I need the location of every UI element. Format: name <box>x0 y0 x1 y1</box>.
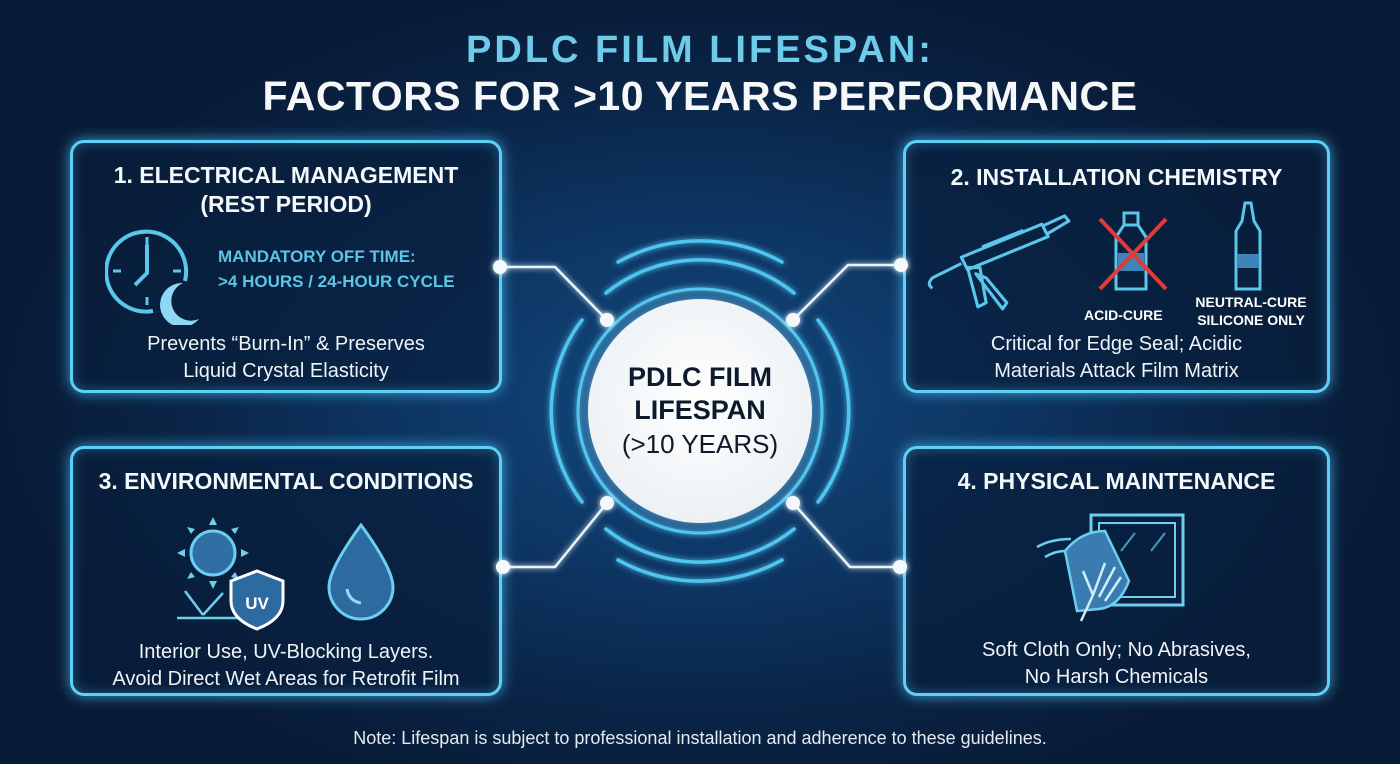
center hub circle <box>588 299 812 523</box>
center hub circle: LIFESPAN <box>634 395 766 425</box>
icon: neutral-cure bottle <box>1234 202 1262 290</box>
panel: electrical management: Liquid Crystal Elasticity <box>183 360 389 382</box>
panel: physical maintenance <box>903 446 1330 696</box>
panel: installation chemistry: Critical for Edge Seal; Acidic <box>991 333 1242 355</box>
panel: electrical management <box>70 140 502 393</box>
title <box>262 29 1138 119</box>
icon: hand wiping window <box>1036 514 1184 622</box>
icon: clock with moon <box>105 230 199 325</box>
icon: acid-cure bottle crossed <box>1098 212 1168 290</box>
panel: environmental conditions <box>70 446 502 696</box>
panel: environmental conditions: Avoid Direct Wet Areas for Retrofit Film <box>112 668 460 690</box>
panel: electrical management: 1. ELECTRICAL MANAGEMENT <box>114 162 458 188</box>
panel: electrical management: (REST PERIOD) <box>200 191 372 217</box>
panel: electrical management: >4 HOURS / 24-HOUR CYCLE <box>218 272 455 291</box>
panel: physical maintenance: 4. PHYSICAL MAINTENANCE <box>958 468 1275 494</box>
title: FACTORS FOR >10 YEARS PERFORMANCE <box>262 73 1138 119</box>
icon: caulk gun <box>928 214 1070 310</box>
panel: electrical management: MANDATORY OFF TIME: <box>218 247 416 266</box>
title: PDLC FILM LIFESPAN: <box>466 29 934 71</box>
panel: physical maintenance: No Harsh Chemicals <box>1025 666 1208 688</box>
panel: electrical management: Prevents “Burn-In” & Preserves <box>147 333 425 355</box>
panel: physical maintenance: Soft Cloth Only; No Abrasives, <box>982 639 1251 661</box>
panel: installation chemistry <box>903 140 1330 393</box>
panel: environmental conditions: Interior Use, UV-Blocking Layers. <box>139 641 433 663</box>
icon: sun with UV shield: UV <box>245 594 269 613</box>
panel: installation chemistry: 2. INSTALLATION CHEMISTRY <box>951 164 1282 190</box>
center hub circle: PDLC FILM <box>628 362 772 392</box>
icon: sun with UV shield <box>177 517 284 631</box>
panel: environmental conditions: 3. ENVIRONMENTAL CONDITIONS <box>99 468 473 494</box>
footnote: Note: Lifespan is subject to professional installation and adherence to these guidelines. <box>353 728 1047 748</box>
panel: installation chemistry: SILICONE ONLY <box>1197 312 1305 328</box>
center hub circle: (>10 YEARS) <box>622 429 778 459</box>
icon: water drop <box>328 522 394 620</box>
panel: installation chemistry: NEUTRAL-CURE <box>1195 294 1307 310</box>
panel: installation chemistry: Materials Attack Film Matrix <box>994 360 1239 382</box>
panel: installation chemistry: ACID-CURE <box>1084 307 1163 323</box>
